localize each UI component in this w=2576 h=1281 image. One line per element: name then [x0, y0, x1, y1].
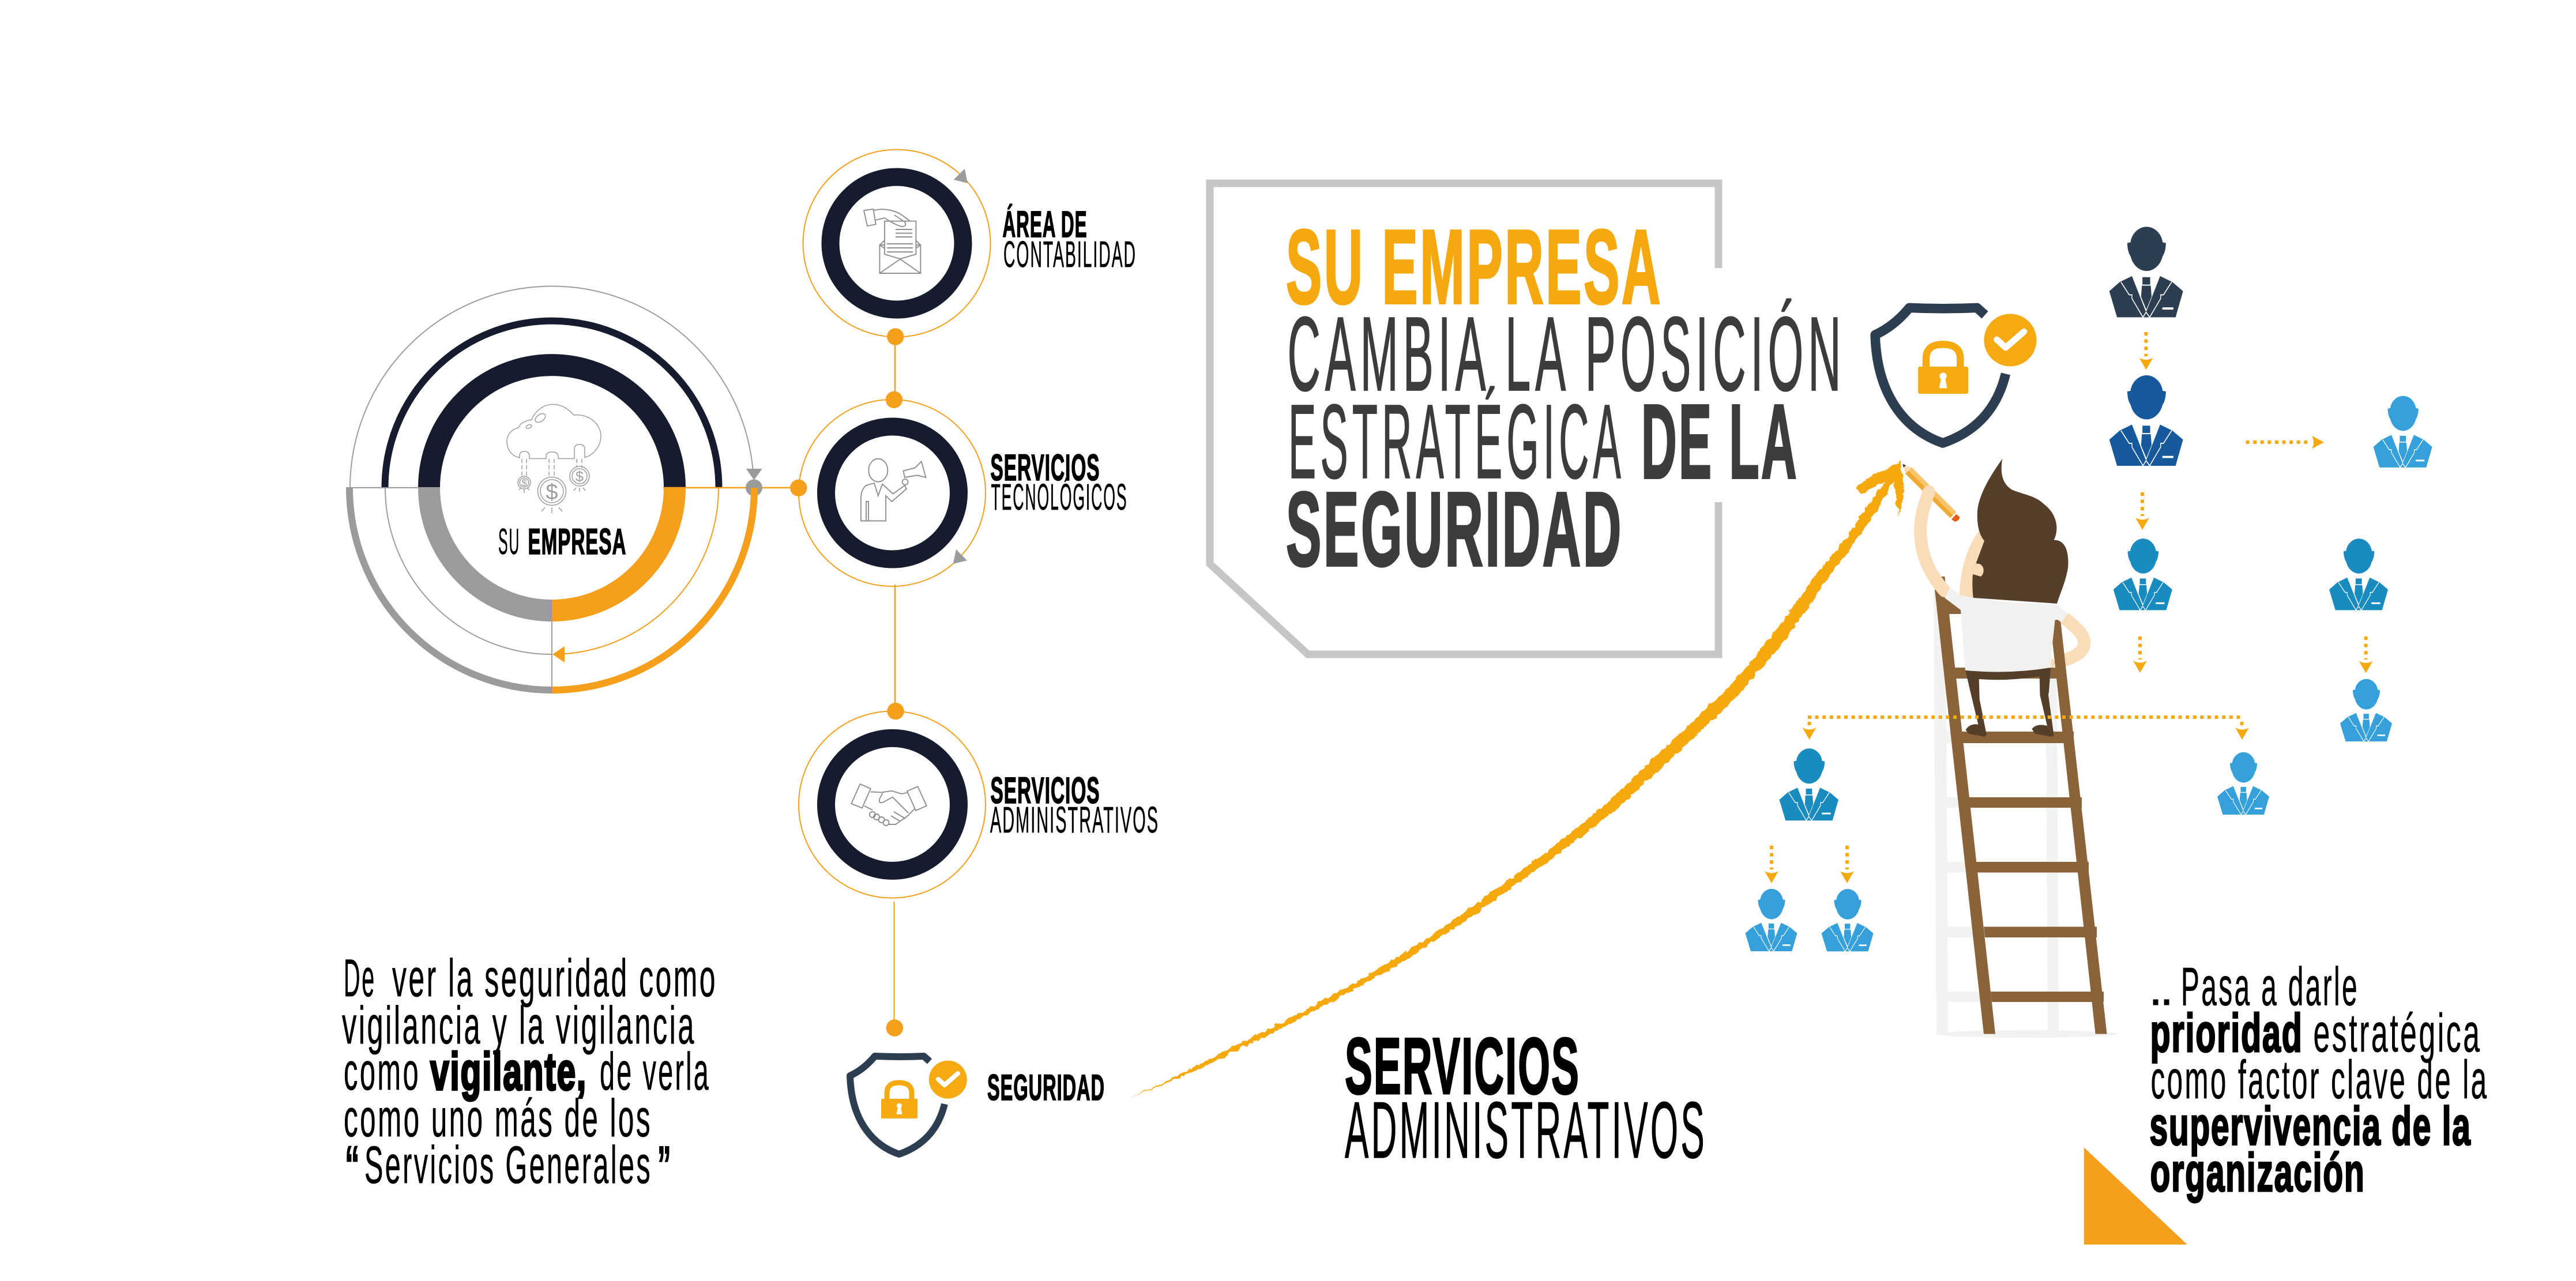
icon: envelope and hand — [864, 209, 920, 273]
person: dark director — [2109, 227, 2183, 317]
ladder — [1935, 577, 2107, 1034]
outer thin grey arc — [350, 286, 753, 488]
grey quarter inner ring — [429, 488, 552, 611]
text: pasa a darle prioridad: prioridad — [2150, 1003, 2303, 1063]
headline: su empresa: SU EMPRESA — [1286, 208, 1663, 326]
headline line 4: SEGURIDAD — [1286, 470, 1623, 588]
text: de ver la seguridad: como uno más de los — [344, 1089, 652, 1148]
text: pasa a darle prioridad: organización — [2150, 1142, 2366, 1203]
arrow: down — [2139, 332, 2153, 370]
connector line to seguridad — [894, 902, 895, 1020]
person: light blue right — [2374, 396, 2432, 468]
label: area de contabilidad: ÁREA DE — [1002, 204, 1088, 245]
icon: shield small — [850, 1056, 967, 1154]
person: blue manager — [2109, 375, 2183, 466]
arrow: grey top — [746, 469, 762, 480]
dot 2 — [886, 391, 902, 408]
label: su empresa: SU — [498, 522, 520, 562]
person: mid blue right — [2329, 538, 2388, 610]
chart: su empresa concentric rings — [346, 286, 799, 690]
arrow: rising hand-drawn curve — [1129, 461, 1905, 1098]
arrow: down — [2359, 636, 2373, 673]
text: CAMBIA LA POSICIÓN — [1287, 295, 1845, 413]
decorative orange triangle — [2084, 1147, 2187, 1245]
grey thin lower arc — [385, 488, 552, 654]
dot 4 — [886, 1019, 903, 1037]
label: servicios administrativos: SERVICIOS — [991, 770, 1100, 811]
pencil — [1902, 464, 1960, 522]
orange quarter inner ring — [552, 488, 675, 611]
connector lines — [894, 337, 896, 711]
person: light blue branch right — [2217, 752, 2269, 815]
icon: handshake — [851, 784, 927, 826]
timeline: service nodes: CONTABILIDAD — [1003, 233, 1137, 275]
dollar signs: $ — [521, 477, 527, 488]
text: de ver la seguridad: de verla — [600, 1042, 710, 1101]
grey node — [746, 480, 762, 496]
text: de ver la seguridad — [342, 949, 717, 1195]
label: servicios tecnologicos — [991, 447, 1128, 518]
dot left of node 2 — [790, 480, 807, 496]
text: pasa a darle prioridad: Pasa a darle — [2181, 956, 2359, 1017]
headline line 3: ESTRATÉGICA — [1288, 382, 1625, 500]
dot 3 — [887, 703, 904, 719]
arrow: right — [2246, 436, 2324, 449]
text: pasa a darle prioridad: .. — [2148, 956, 2174, 1017]
text: ADMINISTRATIVOS — [990, 799, 1159, 841]
timeline: service nodes: TECNOLÓGICOS — [991, 476, 1128, 518]
icon: man with megaphone — [861, 459, 926, 521]
hair — [1972, 459, 2069, 604]
text: de ver la seguridad: De — [344, 949, 376, 1008]
face and neck — [1960, 531, 1984, 598]
dollar signs: $ — [546, 480, 558, 504]
person: mid blue left — [1780, 748, 1838, 820]
arrow: grey marker — [953, 549, 967, 564]
arrow: down — [1840, 846, 1854, 883]
text: de ver la seguridad: ” — [657, 1136, 672, 1195]
text: de ver la seguridad: como — [344, 1042, 420, 1101]
legs and shoes — [1965, 668, 2054, 737]
org chart: people and dashed arrows — [1745, 227, 2432, 951]
text: de ver la seguridad: “ — [345, 1136, 360, 1195]
label: seguridad: SEGURIDAD — [987, 1068, 1105, 1108]
node: servicios administrativos — [799, 711, 1159, 898]
label: servicios administrativos — [990, 770, 1159, 841]
frame — [1210, 183, 1718, 654]
icon: shield large — [1875, 308, 2037, 443]
dollar signs: $ — [576, 469, 584, 485]
shirt — [1945, 587, 2068, 672]
orange horizontal line — [663, 487, 799, 488]
text: de ver la seguridad: ver la seguridad como — [392, 949, 717, 1008]
dark arc upper inner — [429, 365, 675, 488]
orange thin lower arc — [562, 488, 719, 654]
dark arc upper middle — [385, 321, 719, 488]
hand on hip — [2051, 659, 2055, 667]
dot 1 — [887, 328, 904, 345]
text: pasa a darle prioridad — [2148, 956, 2489, 1203]
text: de ver la seguridad: vigilante, — [430, 1042, 587, 1101]
person: mid blue — [2114, 538, 2172, 610]
label: area de contabilidad — [1002, 204, 1137, 275]
node: servicios tecnologicos — [799, 400, 1128, 586]
timeline: service nodes — [790, 150, 1159, 1154]
arrow: down — [2133, 636, 2147, 673]
arrow: orange inner — [552, 646, 565, 662]
grey horizontal line — [346, 487, 440, 488]
orange thick outer arc — [552, 488, 754, 690]
illustration: man on ladder — [1902, 459, 2118, 1038]
arrow: down — [2135, 492, 2149, 530]
grey vertical line — [551, 621, 552, 690]
left arm — [1920, 492, 1945, 591]
person: light blue low left — [1745, 889, 1797, 951]
node: area de contabilidad — [803, 150, 1137, 337]
ladder shadow — [1934, 591, 2118, 1038]
person: light blue lower right — [2340, 679, 2392, 741]
text: de ver la seguridad: vigilancia y la vigilancia — [342, 996, 696, 1055]
person: light blue low right — [1822, 889, 1874, 951]
grey thick outer arc — [349, 488, 552, 690]
heading: servicios administrativos — [1345, 1022, 1707, 1175]
text: ADMINISTRATIVOS — [1345, 1086, 1707, 1175]
label: su empresa — [498, 522, 626, 562]
label: servicios tecnologicos: SERVICIOS — [991, 447, 1100, 488]
ear — [1973, 563, 1984, 577]
heading: servicios administrativos: SERVICIOS — [1345, 1022, 1580, 1111]
dollar signs — [521, 469, 584, 504]
right arm — [2059, 618, 2084, 662]
arrow: grey marker — [954, 169, 968, 183]
text: de ver la seguridad: Servicios Generales — [364, 1136, 652, 1195]
icon: cloud with coins — [507, 404, 601, 513]
panel: headline box: DE LA — [1641, 382, 1799, 500]
arrow: branching line — [1803, 717, 2249, 740]
headline line 3 — [1288, 382, 1799, 500]
label: su empresa: EMPRESA — [528, 522, 626, 562]
arrow: down — [1765, 846, 1778, 883]
panel: headline box — [1210, 183, 1845, 654]
